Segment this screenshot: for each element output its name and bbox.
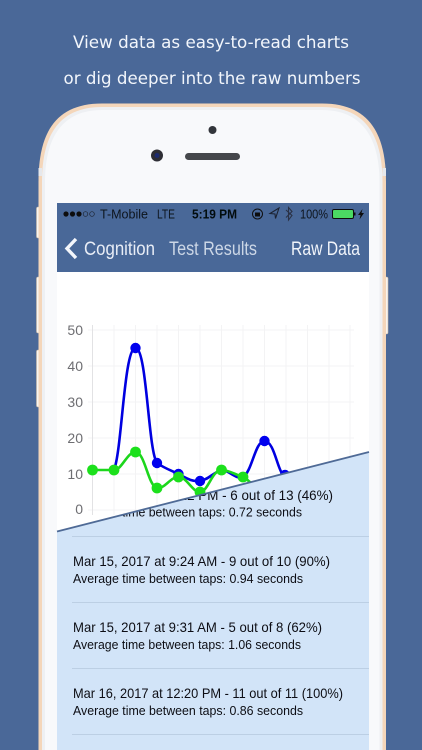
row 2 xyxy=(73,556,330,586)
location arrow xyxy=(270,208,279,218)
row 1: Mar 14, 2017 at 8:12 PM - 6 out of 13 (46%) xyxy=(71,487,333,503)
title: or dig deeper into the raw numbers xyxy=(64,69,361,89)
green series xyxy=(87,446,251,496)
inner rim xyxy=(42,107,382,750)
navigation bar: Test Results xyxy=(169,239,257,260)
row 2: Mar 15, 2017 at 9:24 AM - 9 out of 10 (90%) xyxy=(73,553,330,569)
bluetooth icon xyxy=(286,208,292,220)
line chart xyxy=(67,322,369,517)
phone body xyxy=(36,104,388,750)
side buttons xyxy=(36,207,388,407)
blue series xyxy=(114,343,300,486)
axis labels: 0 xyxy=(75,501,83,517)
signal dots xyxy=(63,211,94,217)
status bar: T-Mobile xyxy=(100,206,148,222)
row 1: Average time between taps: 0.72 seconds xyxy=(73,504,302,520)
row 4: Average time between taps: 0.86 seconds xyxy=(73,703,303,718)
axis labels: 40 xyxy=(67,358,83,374)
status bar: 100% xyxy=(300,206,328,222)
page content xyxy=(36,33,388,750)
title xyxy=(64,33,361,89)
axis labels: 10 xyxy=(67,466,83,482)
grid xyxy=(88,325,369,515)
infographic xyxy=(36,35,388,750)
axis labels xyxy=(67,322,83,517)
charging bolt xyxy=(358,209,364,220)
rotation lock icon xyxy=(252,209,262,219)
navigation bar: Raw Data xyxy=(291,239,360,260)
screen xyxy=(57,203,369,750)
axis labels: 50 xyxy=(67,322,83,338)
front camera xyxy=(151,150,163,162)
navigation bar xyxy=(57,203,369,272)
row 3: Average time between taps: 1.06 seconds xyxy=(73,637,301,652)
row 3: Mar 15, 2017 at 9:31 AM - 5 out of 8 (62%) xyxy=(73,619,322,635)
axis labels: 20 xyxy=(67,430,83,446)
title: View data as easy-to-read charts xyxy=(73,33,349,53)
battery xyxy=(332,210,356,218)
antenna bands xyxy=(38,168,386,176)
row 4: Mar 16, 2017 at 12:20 PM - 11 out of 11 (100%) xyxy=(73,685,343,701)
row 3 xyxy=(73,622,322,652)
list rows xyxy=(71,487,369,734)
white bezel xyxy=(45,110,380,750)
sensor xyxy=(208,126,216,134)
status bar xyxy=(63,206,364,222)
gold frame xyxy=(38,104,386,750)
row 1 xyxy=(123,490,332,519)
diagonal edge xyxy=(57,452,369,532)
axis labels: 30 xyxy=(67,394,83,410)
raw data panel xyxy=(57,452,369,750)
navigation bar: Cognition xyxy=(84,239,155,260)
row 2: Average time between taps: 0.94 seconds xyxy=(73,571,303,586)
speaker xyxy=(185,153,240,160)
row 4 xyxy=(73,688,342,718)
status bar: 5:19 PM xyxy=(192,206,237,222)
back chevron xyxy=(67,239,76,258)
status bar: LTE xyxy=(157,206,175,222)
